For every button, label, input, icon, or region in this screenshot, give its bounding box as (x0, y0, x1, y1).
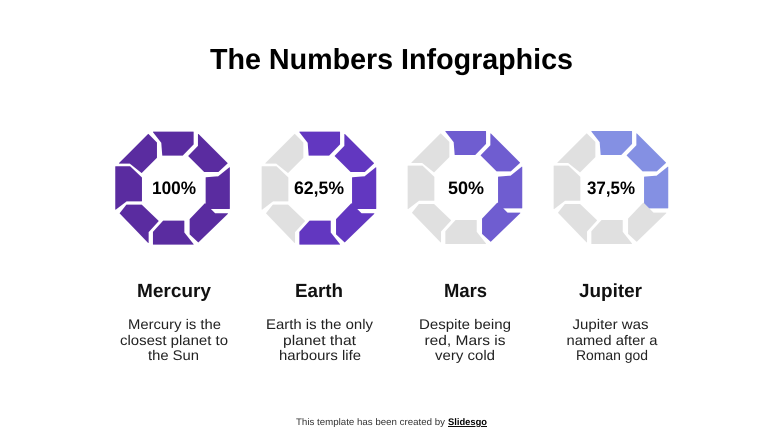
chart: Mercury 100% octagon (116, 132, 230, 244)
text: Mercury description (120, 316, 228, 363)
text: Mercury description: Mercury is the (128, 316, 221, 332)
text: Earth description: harbours life (279, 347, 361, 363)
text: Mars description (419, 316, 511, 363)
value: 37,5%: 37,5% (587, 178, 635, 198)
chart: Earth 62,5% octagon (262, 132, 376, 244)
heading: Earth: Earth (295, 281, 343, 302)
panel: Mercury (116, 132, 230, 363)
footer credit: Slidesgo (448, 417, 487, 428)
panel: Jupiter (554, 131, 668, 363)
value: 62,5%: 62,5% (294, 178, 344, 198)
panel: Mars (408, 131, 522, 363)
text: Mars description: Despite being (419, 316, 511, 332)
text: Earth description (266, 316, 373, 363)
value: 50%: 50% (448, 178, 484, 198)
text: Mars description: red, Mars is (424, 332, 506, 348)
footer credit: This template has been created by (296, 417, 445, 428)
text: Jupiter description: named after a (566, 332, 658, 348)
text: Mars description: very cold (435, 347, 495, 363)
text: Mercury description: closest planet to (120, 332, 228, 348)
text: Jupiter description (566, 316, 658, 363)
panel: Earth (262, 132, 376, 363)
title: The Numbers Infographics (210, 44, 573, 76)
heading: Jupiter: Jupiter (579, 281, 643, 302)
text: Jupiter description: Jupiter was (572, 316, 648, 332)
heading: Mercury: Mercury (137, 281, 211, 302)
value: 100%: 100% (152, 178, 196, 198)
heading: Mars: Mars (444, 281, 487, 302)
text: Mercury description: the Sun (148, 347, 199, 363)
text: Jupiter description: Roman god (576, 347, 648, 363)
chart: Jupiter 37,5% octagon (554, 131, 668, 244)
text: Earth description: planet that (283, 332, 356, 348)
chart: Mars 50% octagon (408, 131, 522, 244)
text: Earth description: Earth is the only (266, 316, 373, 332)
